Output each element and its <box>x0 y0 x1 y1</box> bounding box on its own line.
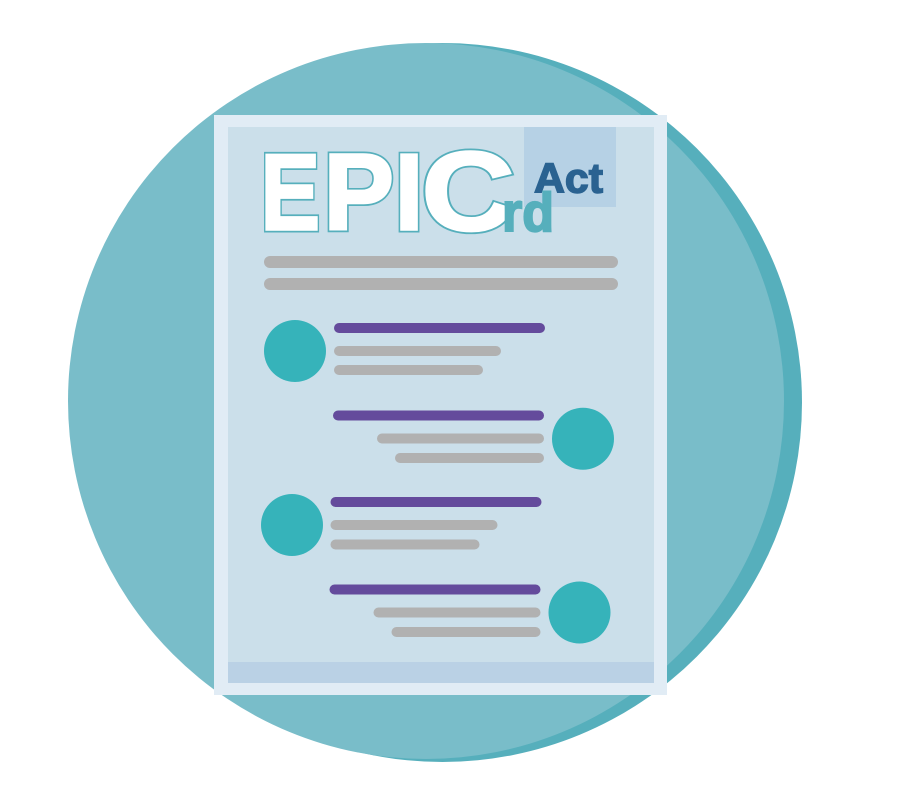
title word: EPIC white fill: I <box>394 131 424 253</box>
title word: EPIC white fill: C <box>422 129 514 254</box>
title word: EPIC white fill: P <box>324 131 394 253</box>
list item 4 <box>330 582 610 644</box>
title word: EPIC: C <box>422 129 514 254</box>
text lines 2 <box>377 434 544 463</box>
bullet circle 3 <box>261 494 323 556</box>
heading bar 1 <box>334 323 545 333</box>
title word: EPIC white fill: E <box>260 132 320 254</box>
footer band <box>228 662 654 683</box>
title word: EPIC: E <box>260 132 320 254</box>
intro text lines <box>264 256 618 290</box>
title word: EPIC white fill <box>260 129 514 254</box>
title word: EPIC <box>260 129 514 254</box>
title logo <box>260 127 616 254</box>
title word: EPIC: I <box>394 131 424 253</box>
heading bar 2 <box>333 410 544 420</box>
heading bar 4 <box>330 584 540 594</box>
document page <box>214 115 667 695</box>
bullet circle 4 <box>548 582 610 644</box>
list item 1 <box>264 320 545 382</box>
background circle: light teal <box>68 43 784 759</box>
word: rd: rd <box>502 181 554 243</box>
text lines 3 <box>330 520 498 550</box>
page frame <box>214 115 667 695</box>
word: Act: Act <box>534 154 603 202</box>
background circle: dark teal shadow <box>83 43 802 762</box>
list item 3 <box>261 494 542 556</box>
bullet circle 1 <box>264 320 326 382</box>
text lines 1 <box>334 346 501 375</box>
text lines 4 <box>374 608 540 637</box>
heading bar 3 <box>330 497 542 507</box>
page interior <box>228 127 654 683</box>
bullet circle 2 <box>552 408 614 470</box>
title word: EPIC: P <box>324 131 394 253</box>
list item 2 <box>333 408 614 470</box>
Act highlight block <box>524 127 616 207</box>
